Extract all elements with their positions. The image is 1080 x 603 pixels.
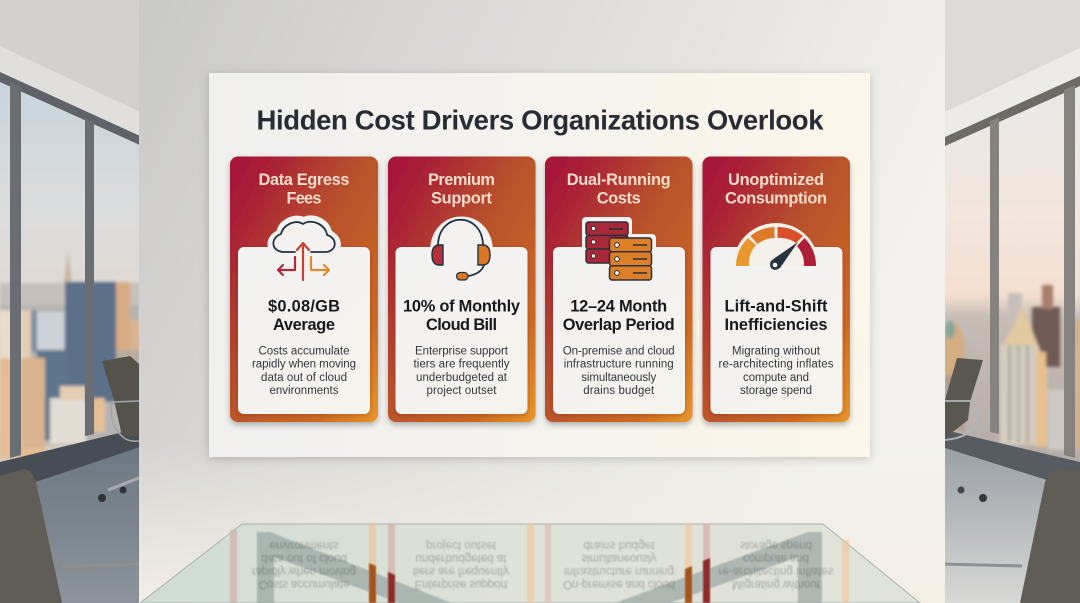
card 2 description: Enterprise support (415, 346, 509, 358)
card 3 heading: Dual-Running (567, 171, 671, 189)
card 2 heading: Support (431, 190, 493, 208)
back office chair, left (98, 356, 139, 502)
icon: server racks (582, 217, 656, 284)
card 3 stat: 12–24 Month (570, 298, 667, 316)
card 4 description: storage spend (740, 385, 812, 397)
card 1 stat: Average (273, 316, 335, 334)
card 4 heading: Unoptimized (728, 171, 824, 189)
card 2 description: underbudgeted at (416, 372, 508, 384)
table reflection of card text: underbudgeted at (416, 552, 507, 564)
card 3 description: drains budget (583, 385, 655, 397)
card 1 stat: $0.08/GB (268, 298, 340, 316)
card 2 description (414, 346, 510, 397)
card 2 description: tiers are frequently (414, 359, 510, 371)
card 4 stat: Lift-and-Shift (724, 298, 828, 316)
table reflection of card text: storage spend (740, 539, 812, 551)
table reflection of card text: rapidly when moving (252, 565, 356, 577)
card 3 description: infrastructure running (564, 359, 674, 371)
card 3 description: simultaneously (581, 372, 656, 384)
card 4 description: compute and (743, 372, 809, 384)
card 1 description: environments (270, 385, 339, 397)
table reflection of card text: tiers are frequently (413, 565, 509, 577)
table reflection of card text: Enterprise support (414, 578, 508, 590)
card 2 heading: Premium (428, 171, 495, 189)
card 1 white panel (238, 247, 370, 414)
wall (139, 0, 945, 603)
back office chair, right (945, 358, 987, 502)
card 4 stat (724, 298, 828, 334)
table reflection of card text: infrastructure running (564, 565, 674, 577)
card 2 stat: Cloud Bill (426, 316, 497, 334)
front office chair, left (0, 469, 191, 603)
card 2 white panel (396, 247, 528, 414)
left office window view (0, 0, 191, 603)
card 3 description: On-premise and cloud (563, 346, 675, 358)
card: data egress fees (230, 156, 378, 422)
right city skyline (939, 285, 1080, 450)
card 1 heading: Data Egress (258, 171, 350, 189)
icon: cloud with arrows (270, 218, 338, 280)
card 4 description: Migrating without (732, 346, 821, 358)
table reflection of table frame (257, 532, 822, 603)
card: dual-running costs (545, 156, 692, 422)
table reflection of card text: environments (270, 539, 339, 551)
card: unoptimized consumption (702, 156, 850, 422)
card 3 stat: Overlap Period (563, 316, 675, 334)
right office window view (887, 0, 1080, 603)
card: premium support (388, 156, 536, 422)
table reflection of card text: simultaneously (582, 552, 657, 564)
left city skyline (0, 250, 140, 458)
card 2 stat: 10% of Monthly (403, 298, 521, 316)
icon: gauge (733, 223, 819, 270)
card 1 description: Costs accumulate (258, 346, 350, 358)
card 3 description (563, 346, 675, 397)
table reflection of card text: project outset (426, 539, 497, 551)
card 4 heading (725, 171, 827, 208)
table reflection of card text: compute and (743, 552, 809, 564)
card 2 description: project outset (426, 385, 497, 397)
card 1 heading (258, 171, 350, 208)
card 3 stat (563, 298, 675, 334)
card 1 description: rapidly when moving (252, 359, 356, 371)
wall poster panel (209, 73, 870, 457)
card 1 heading: Fees (286, 190, 322, 208)
card 3 heading: Costs (597, 190, 641, 208)
table reflection of card text: data out of cloud (261, 552, 347, 564)
card 4 description (718, 346, 834, 397)
table reflection of card edges (230, 524, 849, 603)
table reflection of card text (252, 539, 834, 590)
card 4 description: re-architecting inflates (718, 359, 834, 371)
card 2 heading (428, 171, 495, 208)
card 4 stat: Inefficiencies (724, 316, 828, 334)
table reflection of card text: Migrating without (732, 578, 821, 590)
card 4 white panel (710, 247, 842, 414)
glass conference table (140, 524, 920, 603)
table reflection of card text: re-architecting inflates (718, 565, 834, 577)
table reflection of card text: drains budget (584, 539, 655, 551)
card 1 stat (268, 298, 340, 334)
card 1 description: data out of cloud (261, 372, 347, 384)
card 3 white panel (553, 247, 685, 414)
card 3 heading (567, 171, 671, 208)
icon: headset (431, 218, 492, 280)
front office chair, right (887, 469, 1080, 603)
card 1 description (252, 346, 356, 397)
title: Hidden Cost Drivers Organizations Overlook (256, 104, 824, 136)
card 4 heading: Consumption (725, 190, 827, 208)
card 2 stat (403, 298, 521, 334)
table reflection of card text: On-premise and cloud (563, 578, 675, 590)
table reflection of card text: Costs accumulate (258, 578, 350, 590)
